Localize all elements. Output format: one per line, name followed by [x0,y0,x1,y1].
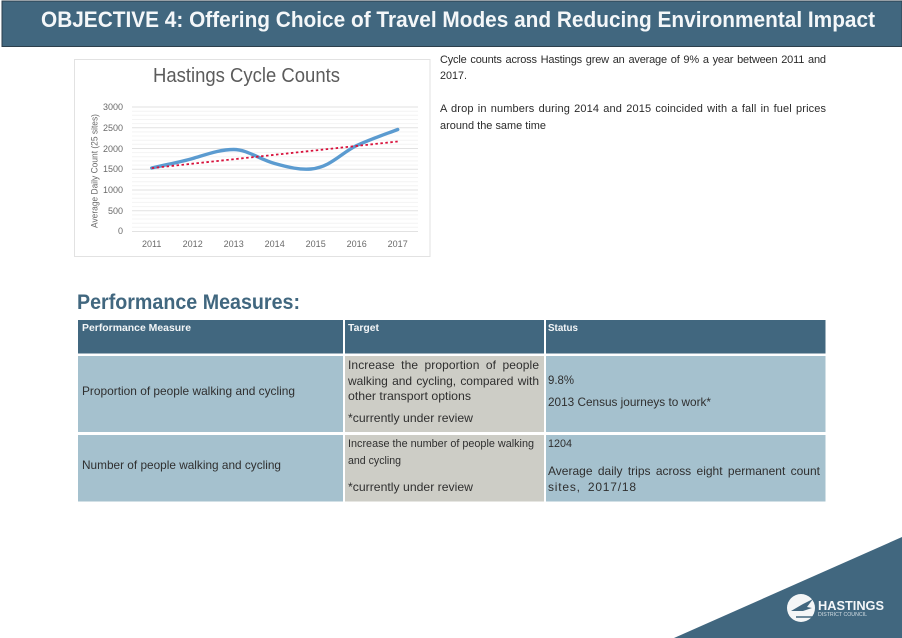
table row: number [78,435,826,502]
table row: number: *currently under review [348,480,473,494]
y axis labels [103,102,123,236]
table row: proportion: Proportion of people walking and cycling [82,384,295,398]
table row: number: Increase the number of people walking [348,438,534,450]
y axis title: Average Daily Count (25 sites) [90,114,100,228]
logo wordmark: HASTINGS [818,598,884,613]
chart title: Hastings Cycle Counts [153,65,340,87]
trend line [152,142,398,168]
logo wordmark: DISTRICT COUNCIL [818,612,867,618]
table row: proportion [78,356,826,432]
table row: proportion: walking and cycling, compared with [347,374,539,388]
y axis labels: 2000 [103,144,123,154]
performance table [78,320,826,502]
table row: proportion: *currently under review [348,411,473,425]
y axis labels: 1500 [103,164,123,174]
x axis labels: 2014 [265,239,285,249]
y axis labels: 500 [108,206,123,216]
table row: number: and cycling [348,455,401,467]
x axis labels: 2012 [183,239,203,249]
x axis labels: 2011 [142,239,161,249]
table row: proportion: 9.8% [548,373,574,387]
table header row: Target [348,322,379,334]
commentary text: around the same time [440,120,546,132]
data line [152,130,398,169]
title banner [2,1,902,46]
x axis labels: 2017 [388,239,408,249]
x axis labels: 2015 [306,239,326,249]
commentary text: A drop in numbers during 2014 and 2015 coincided with a fall in fuel prices [440,103,826,115]
x axis labels: 2016 [347,239,367,249]
table header row [78,320,826,354]
table row: number: Average daily trips across eight permanent count [548,464,821,478]
table row: number: Number of people walking and cycling [82,458,281,472]
table row: proportion: Increase the proportion of people [348,358,539,372]
heading: Performance Measures: Performance Measures: [77,291,300,314]
line chart: Hastings Cycle Counts [74,60,430,256]
commentary text: Cycle counts across Hastings grew an average of 9% a year between 2011 and [440,54,826,66]
footer triangle with logo [674,537,902,638]
table row: number: 1204 [548,438,572,450]
table row: proportion: 2013 Census journeys to work* [548,395,711,409]
commentary text: 2017. [440,70,467,82]
table header row: Status [548,322,578,334]
y axis labels: 2500 [103,123,123,133]
table header row: Performance Measure [82,322,191,334]
y axis labels: 1000 [103,185,123,195]
icon: Hastings logo emblem [787,594,815,622]
x axis labels [142,239,408,249]
y axis labels: 3000 [103,102,123,112]
table row: proportion: other transport options [348,389,471,403]
x axis labels: 2013 [224,239,244,249]
table row: number: sites, 2017/18 [548,480,636,494]
title banner: OBJECTIVE 4: Offering Choice of Travel Modes and Reducing Environmental Impact [41,7,876,32]
commentary text [440,54,826,132]
y axis labels: 0 [118,226,123,236]
